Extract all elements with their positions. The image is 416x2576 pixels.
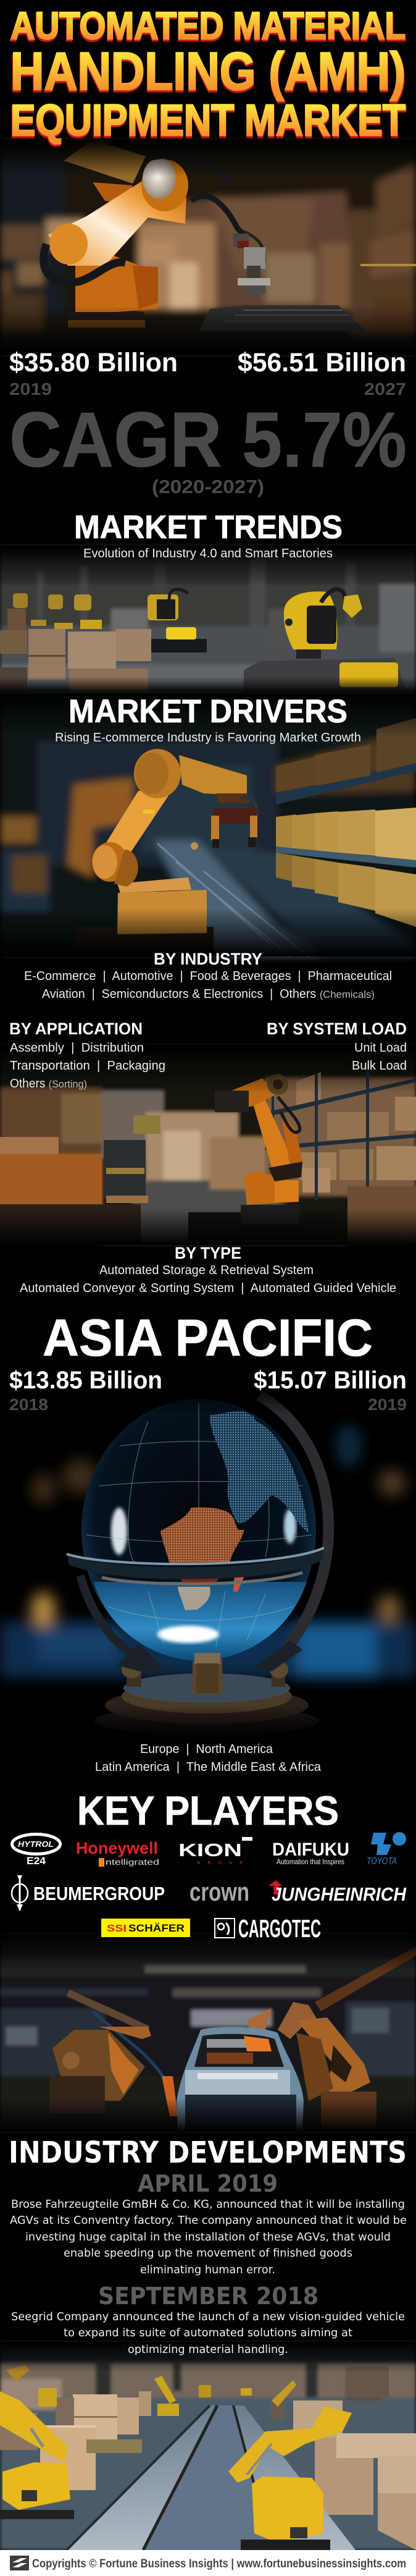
glare [157, 1626, 219, 1643]
title [10, 5, 406, 147]
car body [177, 2027, 304, 2132]
image fade top [0, 1934, 416, 1971]
logo: Cargotec [215, 1914, 321, 1943]
rails [157, 843, 309, 956]
segment: by type: BY TYPE [175, 1244, 241, 1262]
left yellow robot [0, 2391, 74, 2519]
segment: by application: Others (Sorting) [10, 1077, 87, 1091]
logo: Toyota: TOYOTA [367, 1856, 397, 1867]
conveyors [67, 2405, 356, 2550]
market size stats [9, 348, 406, 399]
boxes stack [0, 629, 151, 694]
logo: Honeywell Intelligrated: ntelligrated [106, 1857, 159, 1867]
continents [160, 1411, 309, 1610]
heading: market drivers: Rising E-commerce Industry is Favoring Market Growth [55, 731, 361, 745]
logo: KION [178, 1837, 252, 1865]
logo: SSI Schaefer: SSI [107, 1924, 127, 1934]
ring [67, 1548, 324, 1584]
far robots [0, 593, 102, 654]
stand base [94, 1656, 319, 1736]
regional insights: $15.07 Billion [254, 1367, 407, 1394]
development: September 2018: to expand its suite of automated solutions aiming at [64, 2326, 352, 2339]
frame arc [259, 1395, 328, 1662]
heading: market trends: Evolution of Industry 4.0 and Smart Factories [83, 547, 333, 560]
racks and boxes left [0, 1115, 160, 1244]
market size stats: 2019 [9, 379, 52, 399]
conveyor [199, 305, 366, 331]
robot arm [188, 1074, 336, 1240]
footer [0, 2550, 416, 2576]
image fade bottom [0, 306, 416, 355]
regional insights: 2019 [368, 1395, 407, 1414]
mid robot [148, 589, 207, 652]
development: April 2019: enable speeding up the movement of finished goods [64, 2247, 352, 2260]
shelf ledge [360, 264, 416, 266]
image fade bottom [0, 677, 416, 694]
right yellow robot [228, 2407, 352, 2550]
scene: warehouse robot and conveyor [0, 694, 416, 956]
right box stacks [293, 2367, 416, 2550]
regional insights: $13.85 Billion [9, 1367, 162, 1394]
logo: Beumer Group: BEUMERGROUP [33, 1883, 165, 1904]
logo: SSI Schaefer [101, 1919, 190, 1937]
large yellow robot [244, 589, 407, 694]
logo: Honeywell Intelligrated [76, 1839, 159, 1867]
segment: by system load: Unit Load [354, 1041, 407, 1055]
image fade top [0, 546, 416, 586]
other regions: Latin America | The Middle East & Africa [95, 1760, 322, 1774]
scene: warehouse aisle with robot [0, 1044, 416, 1245]
development: September 2018: Seegrid Company announced the launch of a new vision-guided vehicle [11, 2310, 405, 2323]
segment: by system load: Bulk Load [352, 1059, 407, 1073]
logo: KION: KION [178, 1841, 242, 1860]
logo: Toyota [367, 1832, 406, 1867]
logo: Beumer Group [12, 1875, 165, 1911]
CAGR: (2020-2027) [152, 476, 264, 497]
market size stats: 2027 [364, 379, 406, 399]
heading: market drivers: MARKET DRIVERS [69, 693, 347, 730]
segment: by industry: E-Commerce | Automotive | Food & Beverages | Pharmaceutical [24, 969, 392, 983]
development: April 2019: AGVs at its Conventry factory. The company announced that it would be [10, 2214, 407, 2227]
scene: warehouse robot arm [0, 140, 416, 355]
robot arm [44, 140, 270, 329]
segment: by system load: BY SYSTEM LOAD [267, 1020, 407, 1038]
pedestal front [117, 1641, 302, 1693]
segment: by application: Assembly | Distribution [10, 1041, 144, 1055]
logo: SSI Schaefer: SCHÄFER [128, 1922, 185, 1934]
segment: by type [20, 1244, 396, 1295]
development: April 2019 [10, 2170, 407, 2276]
regional insights: ASIA PACIFIC [43, 1309, 373, 1367]
segment: by application: BY APPLICATION [9, 1020, 143, 1038]
logo: Honeywell Intelligrated: Honeywell [76, 1839, 158, 1857]
logo: Jungheinrich: JUNGHEINRICH [272, 1883, 407, 1905]
segment: by industry: BY INDUSTRY [154, 950, 262, 968]
logo: Daifuku: Automation that Inspires [277, 1857, 344, 1866]
scene: robotic conveyor warehouse [0, 2342, 416, 2550]
scene: car assembly [0, 1934, 416, 2132]
image fade bottom [0, 908, 416, 956]
left box stacks [0, 2391, 151, 2490]
segment: by type: Automated Conveyor & Sorting System | Automated Guided Vehicle [20, 1282, 396, 1295]
logos [12, 1832, 407, 1943]
development: April 2019: investing huge capital in the installation of these AGVs, that would [25, 2231, 391, 2244]
heading: key players: KEY PLAYERS [77, 1788, 339, 1833]
scene: globe [0, 1384, 416, 1739]
other regions: Europe | North America [140, 1742, 273, 1756]
shelves [265, 1063, 416, 1201]
development: September 2018: optimizing material handling. [128, 2343, 288, 2356]
regional insights [9, 1309, 407, 1414]
development: September 2018 [11, 2283, 405, 2356]
image fade top [0, 694, 416, 737]
foreground box [347, 1186, 416, 1244]
image fade bottom [0, 1705, 416, 1739]
segment: by industry: Aviation | Semiconductors & Electronics | Others (Chemicals) [42, 987, 375, 1001]
logo: KION: GROUP [197, 1861, 243, 1865]
grid lines [86, 1403, 312, 1647]
segment: by system load [267, 1020, 407, 1073]
image fade top [0, 140, 416, 177]
segment: by application: Transportation | Packaging [10, 1059, 165, 1073]
development: April 2019: eliminating human error. [140, 2263, 275, 2276]
development: April 2019: Brose Fahrzeugteile GmBH & Co. KG, announced that it will be installing [11, 2198, 405, 2211]
heading: market trends [74, 509, 343, 560]
market size stats: $35.80 Billion [9, 348, 178, 378]
heading: market drivers [55, 693, 361, 745]
segment: by application [9, 1020, 165, 1091]
logo: Daifuku: DAIFUKU [272, 1839, 349, 1860]
logo: Hytrol: HYTROL [18, 1839, 54, 1849]
table glow [0, 1424, 416, 1678]
right beam [315, 1946, 416, 2011]
icon: Fortune Business Insights logo [10, 2556, 29, 2570]
logo: Hytrol [12, 1834, 60, 1867]
image fade top [0, 2342, 416, 2373]
image fade bottom [0, 1208, 416, 1245]
right welding robot [247, 2002, 376, 2132]
other regions [95, 1742, 322, 1774]
development: September 2018: SEPTEMBER 2018 [98, 2283, 318, 2310]
heading: market trends: MARKET TRENDS [74, 509, 343, 546]
market size stats: $56.51 Billion [238, 348, 406, 378]
shelf boxes [276, 718, 416, 927]
sphere lower [94, 1582, 307, 1661]
scene: smart factory [0, 546, 416, 694]
segment: by type: Automated Storage & Retrieval System [99, 1264, 314, 1277]
far yellow robots [6, 2365, 296, 2416]
logo: Cargotec: CARGOTEC [238, 1914, 321, 1943]
development: April 2019: APRIL 2019 [138, 2170, 278, 2197]
logo: Hytrol: E24 [27, 1855, 46, 1867]
regional insights: 2018 [9, 1395, 48, 1414]
image fade top [0, 1044, 416, 1094]
image fade top [0, 1384, 416, 1415]
logo: Crown: crown [189, 1877, 249, 1906]
robot arm [74, 749, 257, 956]
image fade bottom [0, 2098, 416, 2132]
segment: by industry [24, 950, 392, 1001]
left welding robot [49, 1993, 178, 2116]
sphere upper [81, 1399, 316, 1661]
